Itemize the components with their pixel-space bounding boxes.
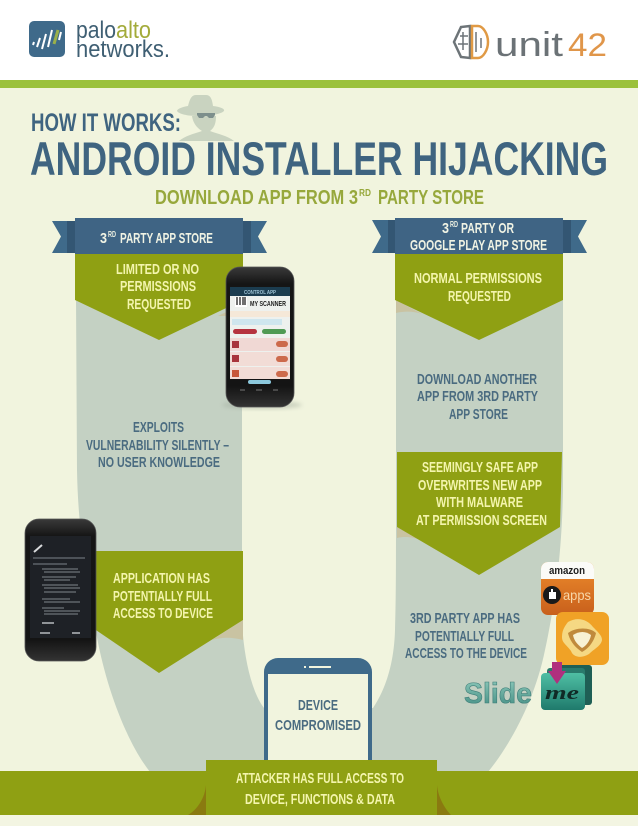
subheading: RD: [359, 188, 371, 199]
shadow: first right arrow: [396, 300, 422, 314]
bottom banner: DEVICE, FUNCTIONS & DATA: [245, 791, 395, 808]
callout: seemingly safe app: AT PERMISSION SCREEN: [416, 512, 547, 529]
logo: Palo Alto Networks: networks.: [76, 36, 170, 63]
icon: orange store: [556, 612, 609, 665]
banner: 3rd party app store: PARTY APP STORE: [120, 230, 213, 247]
icon: SlideMe: me: [545, 683, 580, 704]
callout: application has full access: ACCESS TO DEVICE: [113, 605, 213, 622]
text: download another app: DOWNLOAD ANOTHER: [417, 371, 537, 388]
text: exploits vulnerability: NO USER KNOWLEDGE: [98, 454, 220, 471]
shadow: first left arrow: [218, 306, 243, 316]
text: download another app: APP FROM 3RD PARTY: [417, 388, 538, 405]
bottom banner: [0, 760, 638, 826]
text: download another app: APP STORE: [449, 406, 508, 423]
shadow: second left arrow: [212, 620, 243, 640]
callout: normal permissions: [395, 254, 563, 340]
icon: compromised device: DEVICE: [298, 697, 338, 714]
heading: how it works: HOW IT WORKS:: [31, 109, 181, 137]
icon: amazon apps: apps: [563, 587, 591, 603]
callout: seemingly safe app: WITH MALWARE: [436, 494, 523, 511]
icon: hacker silhouette: [177, 95, 234, 141]
icon: compromised device: COMPROMISED: [275, 717, 361, 734]
banner: 3rd party app store: [52, 218, 267, 254]
icon: SlideMe: [464, 662, 592, 710]
callout: application has full access: APPLICATION HAS: [113, 570, 210, 587]
text: 3rd party app has access: [405, 610, 527, 662]
phone: permission scanner app: [222, 267, 302, 409]
icon: compromised device: [264, 658, 372, 765]
icon: SlideMe: Slide: [464, 678, 532, 710]
callout: limited or no permissions: LIMITED OR NO: [116, 261, 199, 278]
text: exploits vulnerability: VULNERABILITY SILENTLY –: [86, 437, 229, 454]
callout: normal permissions: NORMAL PERMISSIONS: [414, 270, 542, 287]
callout: application has full access: POTENTIALLY FULL: [113, 588, 212, 605]
bottom banner: ATTACKER HAS FULL ACCESS TO: [236, 770, 404, 787]
callout: seemingly safe app: OVERWRITES NEW APP: [418, 477, 542, 494]
text: exploits vulnerability: [86, 419, 229, 471]
icon: amazon apps: amazon: [549, 565, 585, 577]
logo: Palo Alto Networks: alto: [116, 17, 151, 44]
callout: limited or no permissions: [75, 254, 243, 340]
callout: seemingly safe app: [397, 452, 562, 575]
subheading: DOWNLOAD APP FROM 3: [155, 187, 358, 209]
icon: amazon apps: [541, 562, 594, 615]
logo: Unit 42: unit: [495, 26, 564, 64]
header band: [0, 0, 638, 88]
right column: [372, 218, 587, 662]
text: download another app: [417, 371, 538, 423]
banner: 3rd party or google play: GOOGLE PLAY APP STORE: [410, 237, 547, 254]
phone: permission screen: [25, 519, 96, 661]
left column: [52, 218, 267, 673]
banner: 3rd party or google play: PARTY OR: [461, 220, 514, 237]
callout: application has full access: [90, 551, 243, 673]
logo: Unit 42: [454, 26, 607, 64]
grey U-shaped flow path: [76, 296, 563, 772]
logo: Unit 42: 42: [568, 27, 607, 63]
callout: limited or no permissions: REQUESTED: [127, 296, 191, 313]
banner: 3rd party or google play: 3: [442, 220, 449, 237]
text: 3rd party app has access: ACCESS TO THE DEVICE: [405, 645, 527, 662]
callout: seemingly safe app: SEEMINGLY SAFE APP: [422, 459, 538, 476]
text: exploits vulnerability: EXPLOITS: [133, 419, 184, 436]
phone: permission scanner app: CONTROL APP: [244, 290, 277, 296]
phone: permission scanner app: MY SCANNER: [250, 301, 286, 308]
callout: limited or no permissions: PERMISSIONS: [120, 278, 196, 295]
banner: 3rd party or google play: RD: [450, 220, 458, 229]
banner: 3rd party app store: 3: [100, 230, 107, 247]
text: 3rd party app has access: 3RD PARTY APP HAS: [410, 610, 520, 627]
banner: 3rd party or google play: [372, 218, 587, 254]
callout: normal permissions: REQUESTED: [448, 288, 511, 305]
banner: 3rd party app store: RD: [108, 230, 116, 239]
shadow: second right arrow: [397, 527, 422, 541]
logo: Palo Alto Networks: palo: [76, 17, 116, 44]
text: 3rd party app has access: POTENTIALLY FULL: [415, 628, 514, 645]
subheading: PARTY STORE: [378, 187, 484, 209]
logo: Palo Alto Networks: [29, 17, 170, 63]
